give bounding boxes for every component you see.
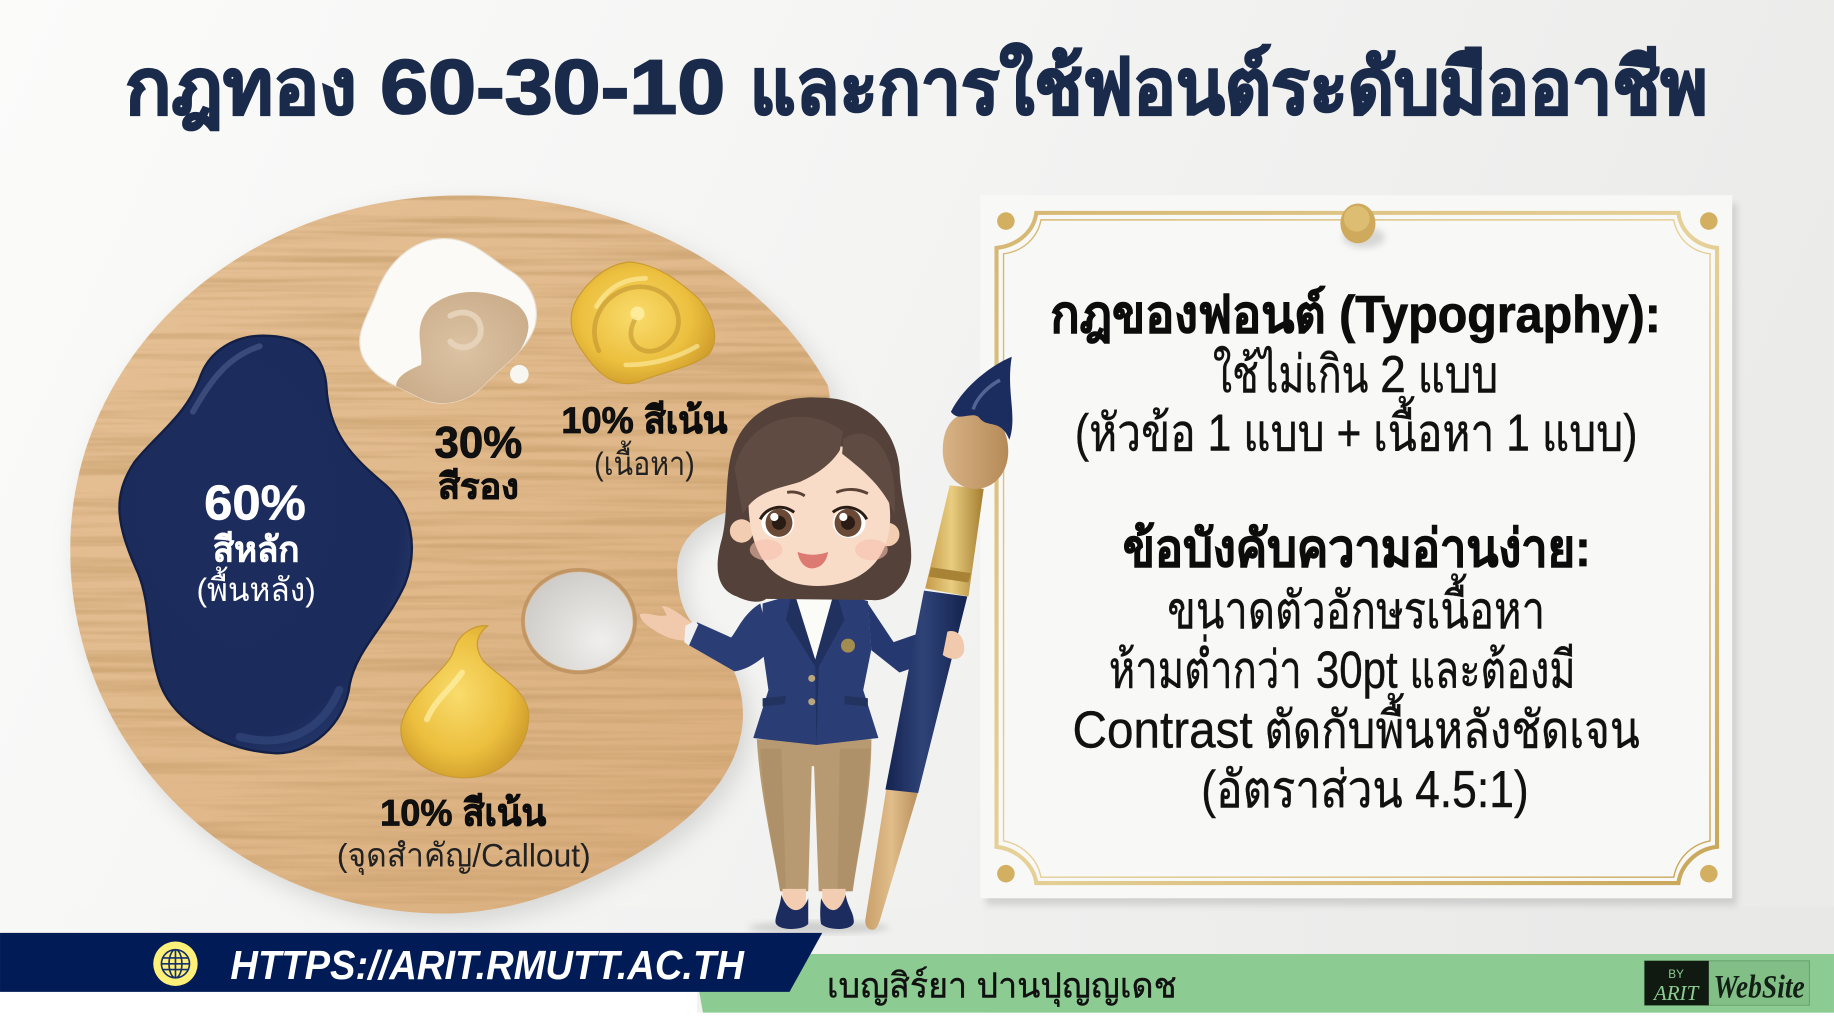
panel text: typography rule: (หัวข้อ 1 แบบ + เนื้อหา 1 แบบ)	[1075, 395, 1637, 461]
gold paint drop 10%	[401, 626, 529, 778]
character: girl in navy blazer	[640, 397, 930, 933]
panel text: typography rule	[1050, 285, 1661, 461]
decorative gold frame	[997, 213, 1717, 883]
palette	[64, 187, 848, 924]
title: และการใช้ฟอนต์ระดับมืออาชีพ	[750, 41, 1708, 130]
trousers	[757, 739, 871, 891]
thumb hole	[525, 572, 633, 670]
url text: HTTPS://ARIT.RMUTT.AC.TH	[230, 942, 745, 988]
panel text: typography rule: แบบ	[1418, 345, 1498, 403]
logo: by ARIT website	[1645, 961, 1809, 1006]
fringe	[735, 417, 895, 515]
gold pin	[1340, 204, 1385, 248]
small white paint dot	[510, 365, 529, 384]
title: กฎทอง	[125, 44, 357, 130]
label 10% callout	[337, 792, 591, 876]
hair back	[718, 397, 911, 602]
navy paint blob 60%: สีหลัก	[213, 530, 299, 569]
panel text: readability rule: และต้องมี	[1409, 641, 1575, 699]
corner dots	[997, 212, 1718, 882]
navy paint blob 60%: (พื้นหลัง)	[197, 566, 316, 608]
label 10% callout: (จุดสำคัญ/Callout)	[337, 837, 591, 876]
title	[125, 41, 1708, 130]
white and beige paint 30%	[360, 239, 536, 406]
label 10% content	[561, 399, 728, 482]
panel text: readability rule: ห้ามต่ำกว่า	[1109, 635, 1302, 699]
floor shadow	[749, 922, 889, 933]
footer: navy url banner	[0, 933, 822, 992]
face	[730, 444, 899, 586]
panel text: readability rule: ข้อบังคับความอ่านง่าย:	[1123, 519, 1591, 577]
panel: font rules	[980, 195, 1737, 905]
panel text: readability rule: ตัดกับพื้นหลังชัดเจน	[1264, 692, 1640, 758]
label 10% callout: 10% สีเน้น	[380, 792, 547, 834]
right arm	[868, 604, 930, 673]
label 10% content: (เนื้อหา)	[594, 440, 695, 482]
panel text: typography rule: ใช้ไม่เกิน	[1213, 345, 1368, 403]
30% label	[435, 418, 522, 506]
footer: green author bar	[0, 954, 1834, 1024]
logo: by ARIT website: WebSite	[1714, 970, 1805, 1006]
hand gripping brush	[943, 631, 964, 659]
title: 60-30-10	[380, 44, 725, 130]
panel text: typography rule: กฎของฟอนต์ (Typography):	[1050, 285, 1661, 343]
panel text: readability rule	[1073, 519, 1640, 818]
panel text: readability rule: Contrast	[1073, 700, 1253, 758]
navy paint blob 60%: 60%	[204, 476, 306, 530]
logo: by ARIT website: ARIT	[1652, 981, 1700, 1005]
30% label: สีรอง	[438, 467, 519, 506]
panel text: readability rule: (อัตราส่วน 4.5:1)	[1201, 760, 1529, 818]
gold paint swirl 10%	[571, 262, 715, 384]
label 10% content: 10% สีเน้น	[561, 399, 728, 441]
logo: by ARIT website: BY	[1668, 968, 1684, 981]
panel text: readability rule: ขนาดตัวอักษรเนื้อหา	[1167, 573, 1545, 639]
navy paint blob 60%	[119, 336, 412, 753]
icon: globe	[153, 942, 198, 986]
panel text: readability rule: 30pt	[1316, 641, 1398, 699]
eyes and mouth	[760, 489, 868, 568]
blazer	[753, 585, 878, 745]
author name: เบญสิร์ยา ปานปุญญเดช	[827, 967, 1177, 1007]
icon: large paint brush	[865, 357, 1012, 930]
shoes	[775, 889, 854, 929]
pointing arm and hand	[640, 604, 772, 671]
panel text: typography rule: 2	[1380, 345, 1406, 403]
30% label: 30%	[435, 418, 522, 467]
